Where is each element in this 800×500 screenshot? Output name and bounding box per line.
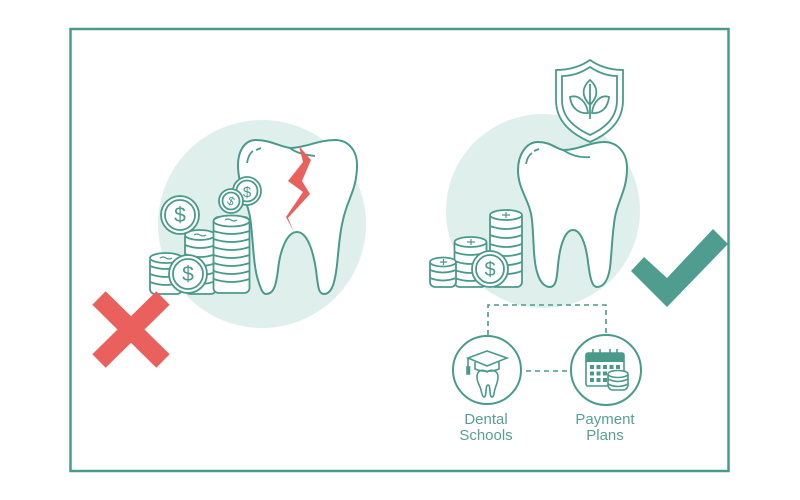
option: dental schools [453,336,521,444]
icon: green check mark [631,229,728,307]
coin stack medium [185,230,216,294]
icon: coin stacks right [430,210,522,287]
panel: protected affordable care [430,60,728,444]
coin front: $ [182,263,194,286]
coin flying front: $ [225,193,237,209]
coin flying back: $ [243,184,252,201]
coin stack tall [490,210,522,287]
option: payment plans: Plans [586,427,624,444]
icon: healthy tooth [518,142,627,287]
icon: cracked tooth [238,140,357,294]
icon: shield with leaves [556,60,623,142]
panel: costly untreated decay [99,120,366,361]
coin upper large: $ [174,204,186,227]
label: Dental Schools: Dental [464,411,508,428]
coin front: $ [484,259,496,281]
icon: coin stacks left [150,177,261,294]
coin stack small [430,258,456,287]
label: Payment Plans: Payment [575,411,635,428]
option: payment plans [571,335,641,444]
option: dental schools: Schools [459,427,513,444]
coin stack tall [214,216,250,293]
outer frame [70,29,728,471]
background circle left [158,120,366,328]
coin stack medium [454,237,486,287]
icon: red cross [99,298,163,361]
icon: calendar and coins [571,335,641,405]
dashed connector middle [526,370,568,372]
icon: graduation cap tooth [453,336,521,404]
coin stack small [150,253,182,294]
dashed connector top [488,305,606,335]
background circle right [446,114,640,308]
